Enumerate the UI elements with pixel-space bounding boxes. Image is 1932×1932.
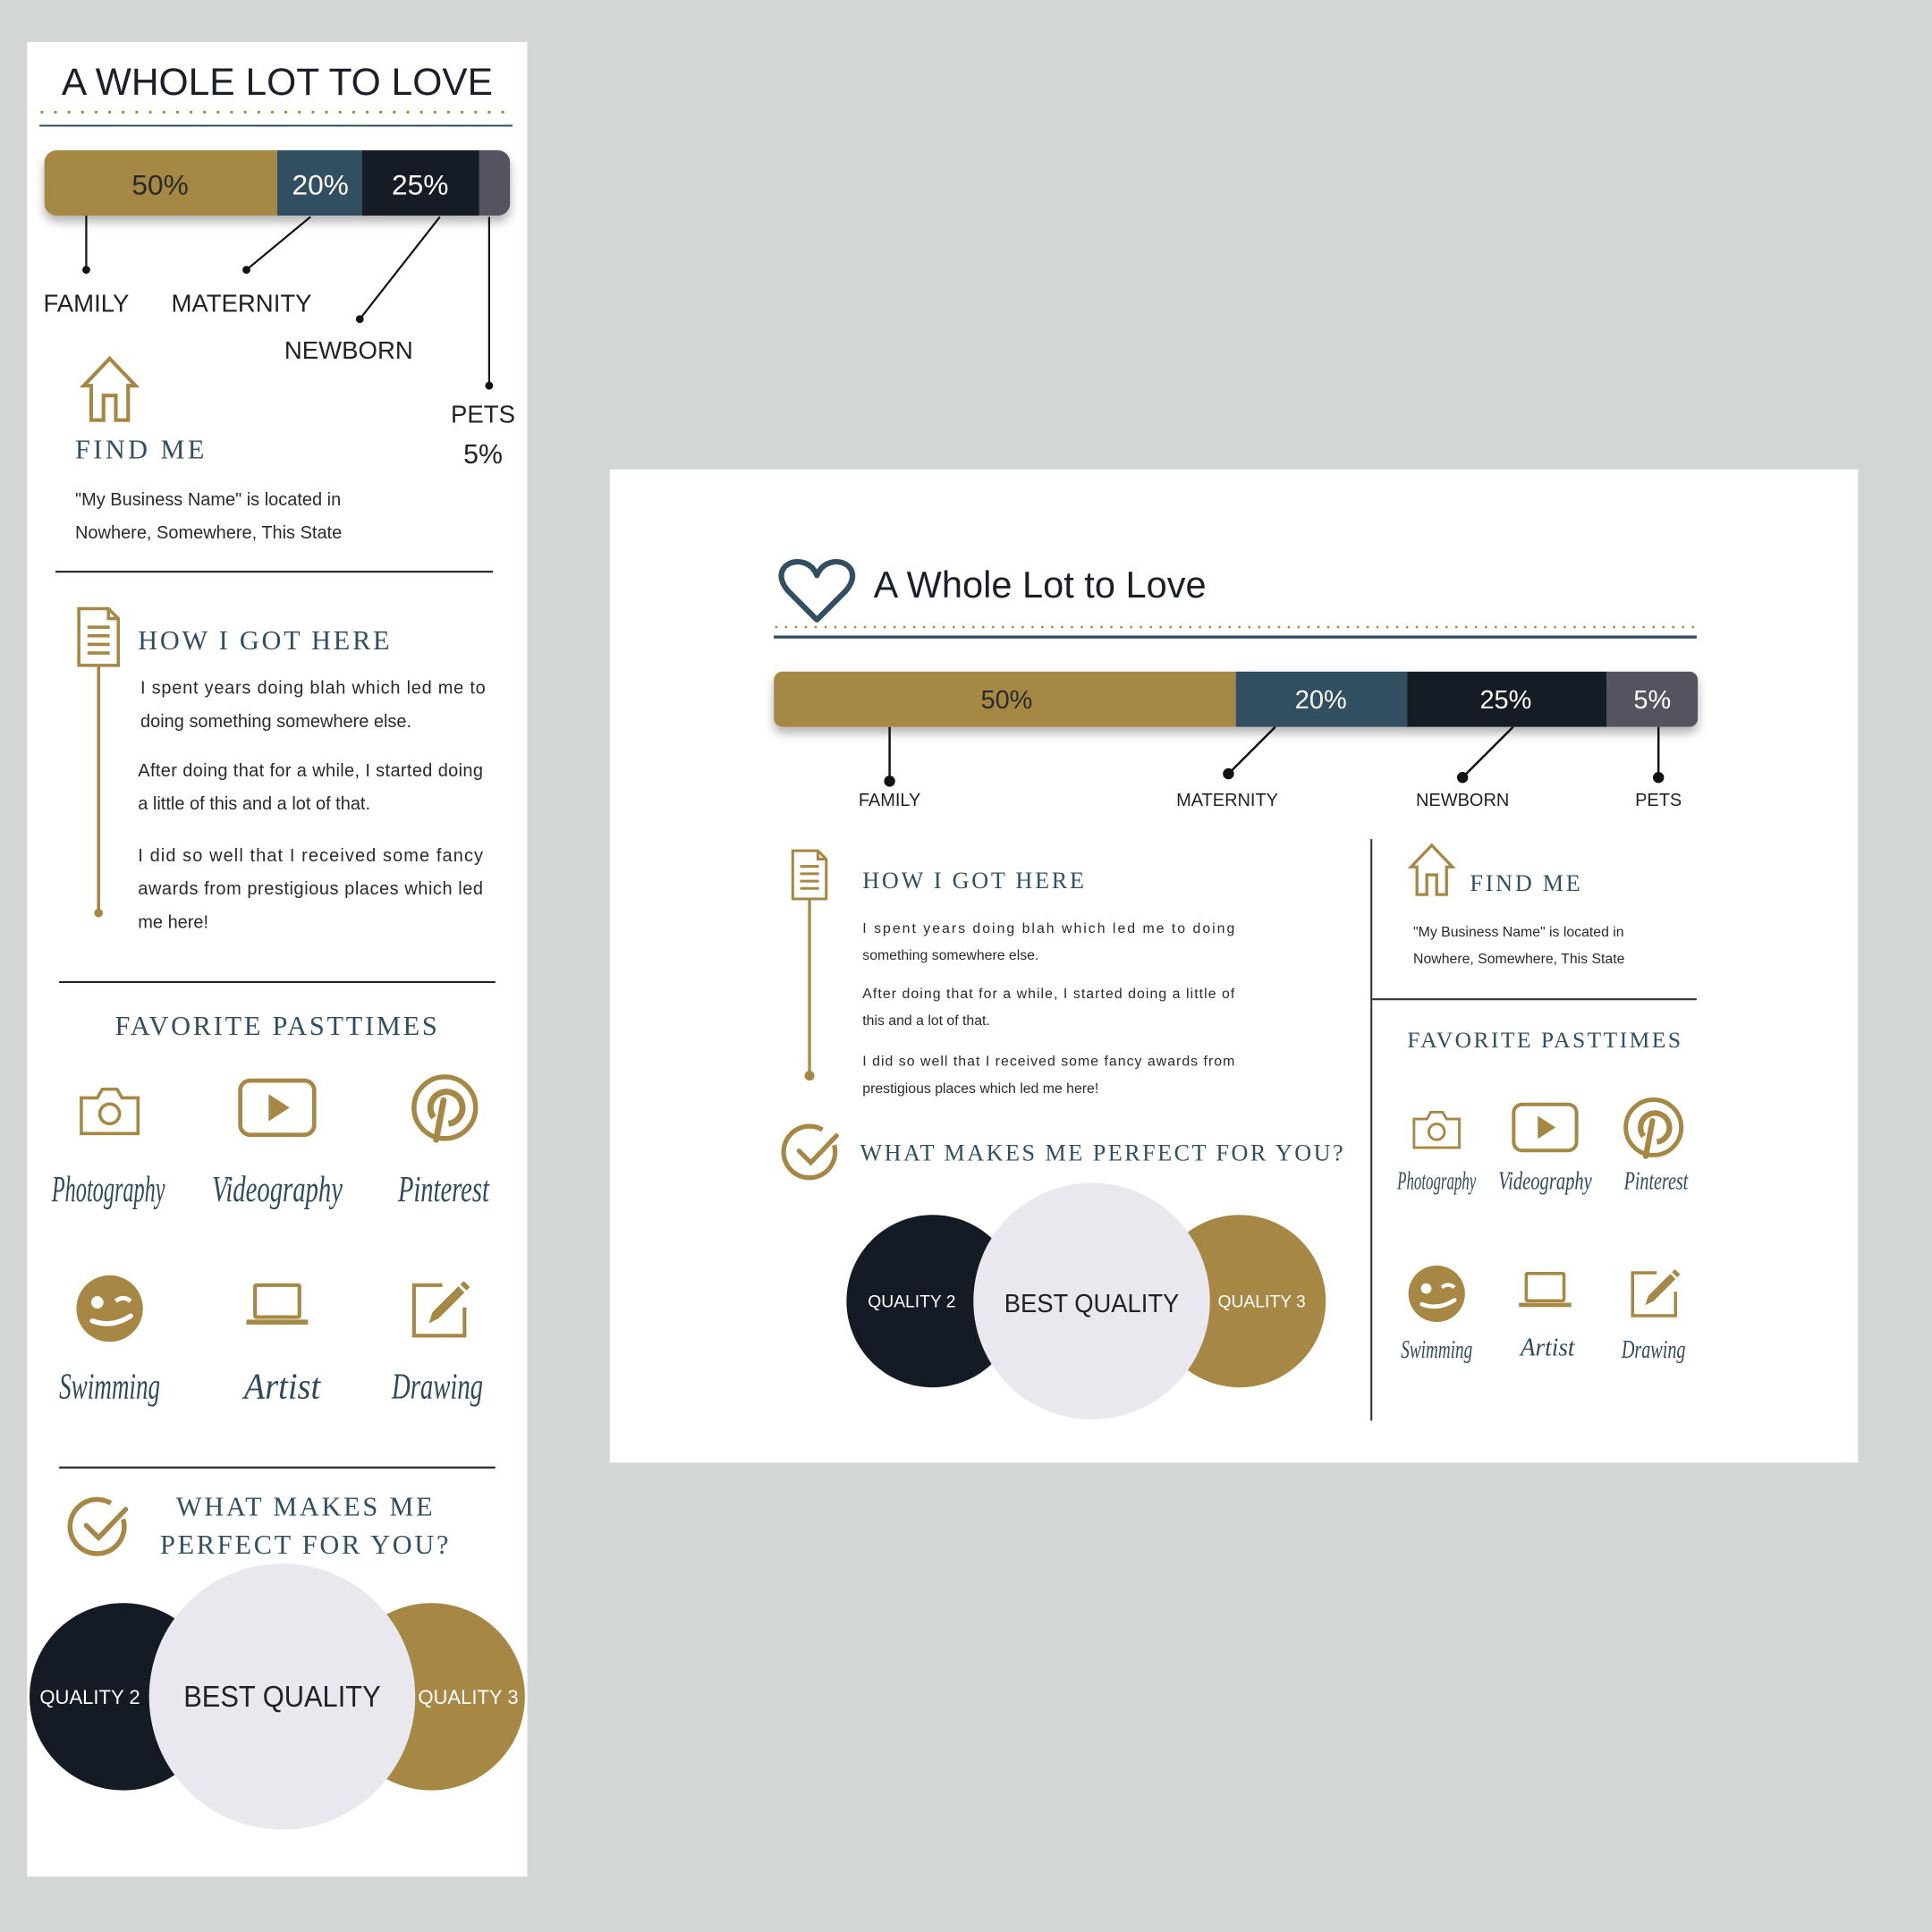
icons: pasttimes grid: Photography: [1397, 1166, 1476, 1195]
icons: pasttimes grid: Pinterest: [397, 1168, 490, 1209]
icons: pasttimes grid: Pinterest: [1623, 1166, 1689, 1195]
bar chart: 25%: [392, 169, 448, 201]
text: location: Nowhere, Somewhere, This State: [1413, 952, 1625, 967]
bar chart: [43, 150, 515, 470]
text: story: doing something somewhere else.: [140, 712, 411, 732]
icon: heart: [782, 562, 852, 620]
text: location: "My Business Name" is located in: [75, 490, 341, 510]
bar chart: 20%: [1295, 686, 1347, 715]
text: story: I did so well that I received some fancy awards from: [862, 1055, 1234, 1070]
bar chart: PETS: [451, 401, 515, 428]
venn: qualities: BEST QUALITY: [183, 1681, 381, 1714]
icon: document: [792, 851, 826, 899]
icons: pasttimes grid: Videography: [1498, 1166, 1592, 1195]
bar chart: 25%: [1479, 686, 1531, 715]
text: story: I did so well that I received some fancy: [138, 846, 483, 866]
icons: pasttimes grid: [51, 1077, 490, 1407]
icons: pasttimes grid: Drawing: [391, 1366, 483, 1407]
heading: what makes me perfect: [160, 1491, 451, 1560]
heading: favorite pasttimes: FAVORITE PASTTIMES: [114, 1011, 439, 1041]
text: location: [75, 490, 342, 543]
icons: pasttimes grid: Videography: [212, 1168, 343, 1209]
title: A Whole Lot to Love: [874, 564, 1207, 606]
venn: qualities: QUALITY 2: [868, 1293, 955, 1312]
venn: qualities: QUALITY 2: [39, 1686, 140, 1708]
icon: check: [70, 1499, 126, 1554]
text: story: After doing that for a while, I started doing: [138, 761, 483, 781]
bar chart: NEWBORN: [1416, 791, 1509, 810]
venn: qualities: [30, 1563, 525, 1830]
text: story: a little of this and a lot of that.: [138, 794, 370, 814]
text: location: [1413, 925, 1625, 967]
icons: pasttimes grid: Artist: [1519, 1333, 1575, 1361]
heading: what makes me perfect: PERFECT FOR YOU?: [160, 1530, 451, 1560]
bar chart: 50%: [131, 169, 189, 201]
heading: how I got here: HOW I GOT HERE: [138, 625, 392, 656]
icons: pasttimes grid: Photography: [51, 1168, 165, 1209]
bar chart: FAMILY: [859, 791, 920, 810]
bar chart: [774, 672, 1698, 810]
bar chart: 5%: [1633, 686, 1671, 715]
bar chart: 5%: [463, 440, 503, 470]
text: story: [862, 921, 1235, 1097]
venn: qualities: [846, 1182, 1326, 1419]
icon: house: [1411, 845, 1453, 894]
heading: what makes me perfect: WHAT MAKES ME PERFECT FOR YOU?: [860, 1140, 1345, 1166]
text: location: Nowhere, Somewhere, This State: [75, 523, 342, 543]
text: location: "My Business Name" is located in: [1413, 925, 1624, 940]
bar chart: MATERNITY: [171, 290, 312, 318]
text: story: this and a lot of that.: [862, 1013, 990, 1029]
heading: how I got here: HOW I GOT HERE: [862, 868, 1087, 894]
heading: what makes me perfect: WHAT MAKES ME: [176, 1491, 435, 1521]
text: story: [138, 679, 486, 932]
icons: pasttimes grid: Drawing: [1621, 1335, 1685, 1364]
heading: find me: FIND ME: [1470, 870, 1583, 896]
text: story: I spent years doing blah which led me to doing: [862, 921, 1234, 936]
panel: left vertical infographic: [27, 42, 528, 1877]
text: story: I spent years doing blah which led me to: [140, 679, 486, 699]
icon: check: [784, 1126, 836, 1178]
icon: house: [84, 359, 136, 420]
heading: find me: FIND ME: [75, 434, 208, 464]
icons: pasttimes grid: Swimming: [59, 1366, 160, 1407]
venn: qualities: QUALITY 3: [418, 1686, 519, 1708]
icons: pasttimes grid: Artist: [242, 1366, 322, 1407]
title: A WHOLE LOT TO LOVE: [62, 61, 493, 104]
heading: favorite pasttimes: FAVORITE PASTTIMES: [1407, 1027, 1683, 1053]
icons: pasttimes grid: [1397, 1099, 1689, 1364]
text: story: prestigious places which led me here!: [862, 1081, 1098, 1097]
text: story: me here!: [138, 912, 208, 932]
bar chart: MATERNITY: [1176, 791, 1278, 810]
bar chart: 20%: [292, 169, 349, 201]
bar chart: FAMILY: [43, 290, 129, 318]
icon: document: [79, 609, 118, 665]
venn: qualities: BEST QUALITY: [1004, 1290, 1179, 1318]
bar chart: PETS: [1635, 791, 1682, 810]
icons: pasttimes grid: Swimming: [1401, 1335, 1472, 1364]
text: story: After doing that for a while, I started doing a little of: [862, 987, 1235, 1002]
text: story: something somewhere else.: [862, 948, 1038, 963]
panel: right horizontal infographic: [610, 470, 1858, 1462]
bar chart: 50%: [981, 686, 1032, 715]
bar chart: NEWBORN: [284, 336, 413, 364]
venn: qualities: QUALITY 3: [1218, 1293, 1306, 1312]
text: story: awards from prestigious places which led: [138, 879, 483, 899]
